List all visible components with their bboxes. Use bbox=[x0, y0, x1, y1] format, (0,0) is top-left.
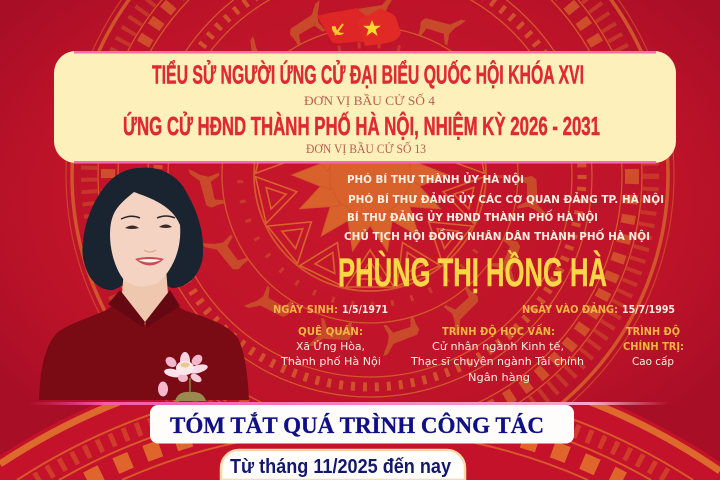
party admission date bbox=[522, 302, 675, 316]
electoral unit 4: ĐƠN VỊ BẦU CỬ SỐ 4 bbox=[304, 93, 436, 108]
hometown: QUÊ QUÁN: bbox=[298, 325, 363, 338]
drum central star bbox=[255, 63, 485, 287]
pink divider bbox=[28, 402, 668, 405]
lotus flower bbox=[158, 352, 209, 401]
positions list bbox=[344, 172, 664, 243]
date pill bbox=[221, 450, 465, 480]
education: Thạc sĩ chuyên ngành Tài chính bbox=[410, 356, 584, 368]
collar bbox=[108, 290, 180, 327]
political theory level bbox=[623, 325, 684, 368]
hair bbox=[82, 168, 203, 290]
portrait bbox=[39, 168, 249, 401]
drum animals ring bbox=[188, 0, 551, 356]
party admission date: 15/7/1995 bbox=[622, 304, 675, 316]
electoral unit 13: ĐƠN VỊ BẦU CỬ SỐ 13 bbox=[306, 141, 426, 156]
section heading box: TÓM TẮT QUÁ TRÌNH CÔNG TÁC bbox=[170, 412, 544, 438]
date of birth bbox=[273, 303, 388, 316]
hometown bbox=[280, 325, 381, 368]
eyes and brows bbox=[121, 216, 175, 219]
nose bbox=[144, 250, 156, 252]
party flag bbox=[317, 8, 372, 43]
positions list: CHỦ TỊCH HỘI ĐỒNG NHÂN DÂN THÀNH PHỐ HÀ NỘI bbox=[344, 228, 650, 243]
date of birth: NGÀY SINH: bbox=[273, 303, 338, 316]
date pill: Từ tháng 11/2025 đến nay bbox=[230, 456, 452, 478]
section heading box bbox=[150, 405, 574, 444]
hometown: Thành phố Hà Nội bbox=[280, 356, 381, 368]
lips bbox=[135, 257, 164, 266]
neck bbox=[122, 268, 168, 324]
party admission date: NGÀY VÀO ĐẢNG: bbox=[522, 302, 618, 316]
face bbox=[110, 192, 180, 287]
date of birth: 1/5/1971 bbox=[342, 304, 388, 316]
positions list: BÍ THƯ ĐẢNG ỦY HĐND THÀNH PHỐ HÀ NỘI bbox=[347, 209, 598, 224]
positions list: PHÓ BÍ THƯ ĐẢNG ỦY CÁC CƠ QUAN ĐẢNG TP. HÀ NỘI bbox=[348, 192, 664, 206]
bottom band with large drum arcs bbox=[0, 404, 720, 480]
political theory level: Cao cấp bbox=[632, 356, 674, 368]
flags bbox=[317, 8, 401, 46]
aodai dress bbox=[39, 300, 249, 400]
national flag bbox=[357, 8, 401, 46]
hometown: Xã Ứng Hòa, bbox=[296, 340, 365, 353]
political theory level: CHÍNH TRỊ: bbox=[623, 340, 684, 353]
education bbox=[410, 323, 584, 384]
political theory level: TRÌNH ĐỘ bbox=[626, 325, 680, 338]
header panel bbox=[54, 51, 676, 164]
positions list: PHÓ BÍ THƯ THÀNH ỦY HÀ NỘI bbox=[347, 172, 524, 186]
education: TRÌNH ĐỘ HỌC VẤN: bbox=[442, 323, 555, 338]
education: Ngân hàng bbox=[468, 372, 530, 384]
education: Cử nhân ngành Kinh tế, bbox=[432, 341, 564, 353]
